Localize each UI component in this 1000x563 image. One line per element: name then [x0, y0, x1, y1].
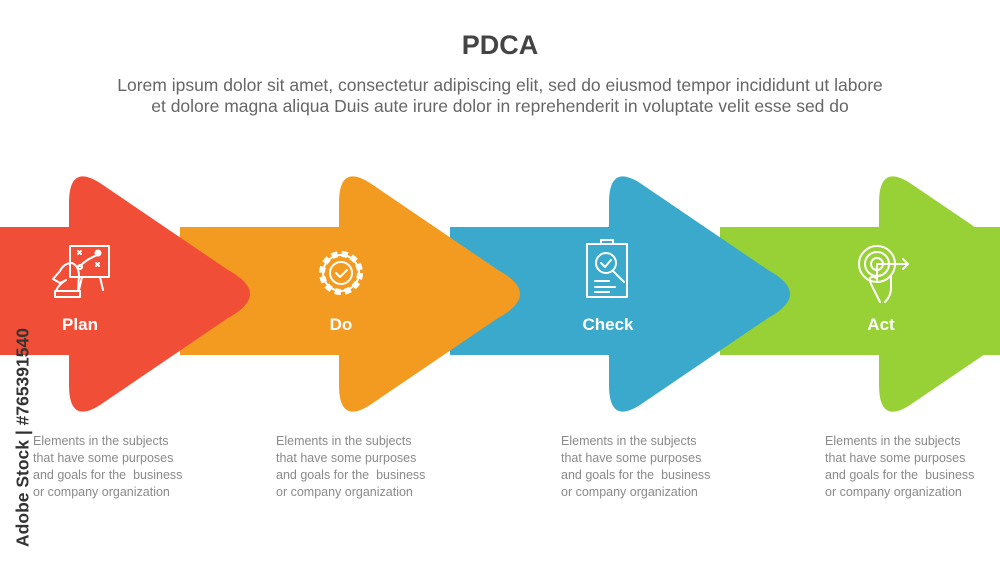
- text: do description: or company organization: [276, 485, 413, 499]
- segment: act: [720, 176, 1000, 412]
- icon: plan strategy board: [53, 246, 109, 297]
- text: check description: [561, 434, 710, 499]
- text: plan description: that have some purposes: [33, 451, 173, 465]
- segment: plan: [0, 176, 250, 412]
- text: do description: and goals for the business: [276, 468, 425, 482]
- text: check description: Elements in the subjects: [561, 434, 696, 448]
- text: act description: and goals for the business: [825, 468, 974, 482]
- text: check description: that have some purposes: [561, 451, 701, 465]
- text: act description: that have some purposes: [825, 451, 965, 465]
- subtitle: et dolore magna aliqua Duis aute irure dolor in reprehenderit in voluptate velit esse sed do: [151, 96, 849, 116]
- text: plan description: Elements in the subjects: [33, 434, 168, 448]
- segment: do: [180, 176, 520, 412]
- text: act description: Elements in the subjects: [825, 434, 960, 448]
- text: do description: Elements in the subjects: [276, 434, 412, 448]
- text: plan description: and goals for the business: [33, 468, 182, 482]
- text: act description: [825, 434, 974, 499]
- text: do description: that have some purposes: [276, 451, 416, 465]
- icon: do gear: [322, 254, 360, 292]
- label: Plan: Plan: [62, 315, 98, 334]
- icon: act target: [859, 246, 908, 302]
- text: check description: and goals for the business: [561, 468, 710, 482]
- label: Do: Do: [330, 315, 352, 334]
- segment: check: [450, 176, 790, 412]
- text: do description: [276, 434, 425, 499]
- subtitle: [117, 75, 883, 116]
- label: Check: Check: [582, 315, 634, 334]
- watermark: stock id: Adobe Stock | #765391540: [12, 328, 32, 547]
- label: Act: Act: [867, 315, 895, 334]
- text: act description: or company organization: [825, 485, 962, 499]
- text: plan description: or company organization: [33, 485, 170, 499]
- text: plan description: [33, 434, 182, 499]
- title: PDCA: [462, 30, 538, 60]
- text: check description: or company organization: [561, 485, 698, 499]
- subtitle: Lorem ipsum dolor sit amet, consectetur adipiscing elit, sed do eiusmod tempor incididunt ut labore: [117, 75, 883, 95]
- icon: check clipboard: [587, 240, 627, 297]
